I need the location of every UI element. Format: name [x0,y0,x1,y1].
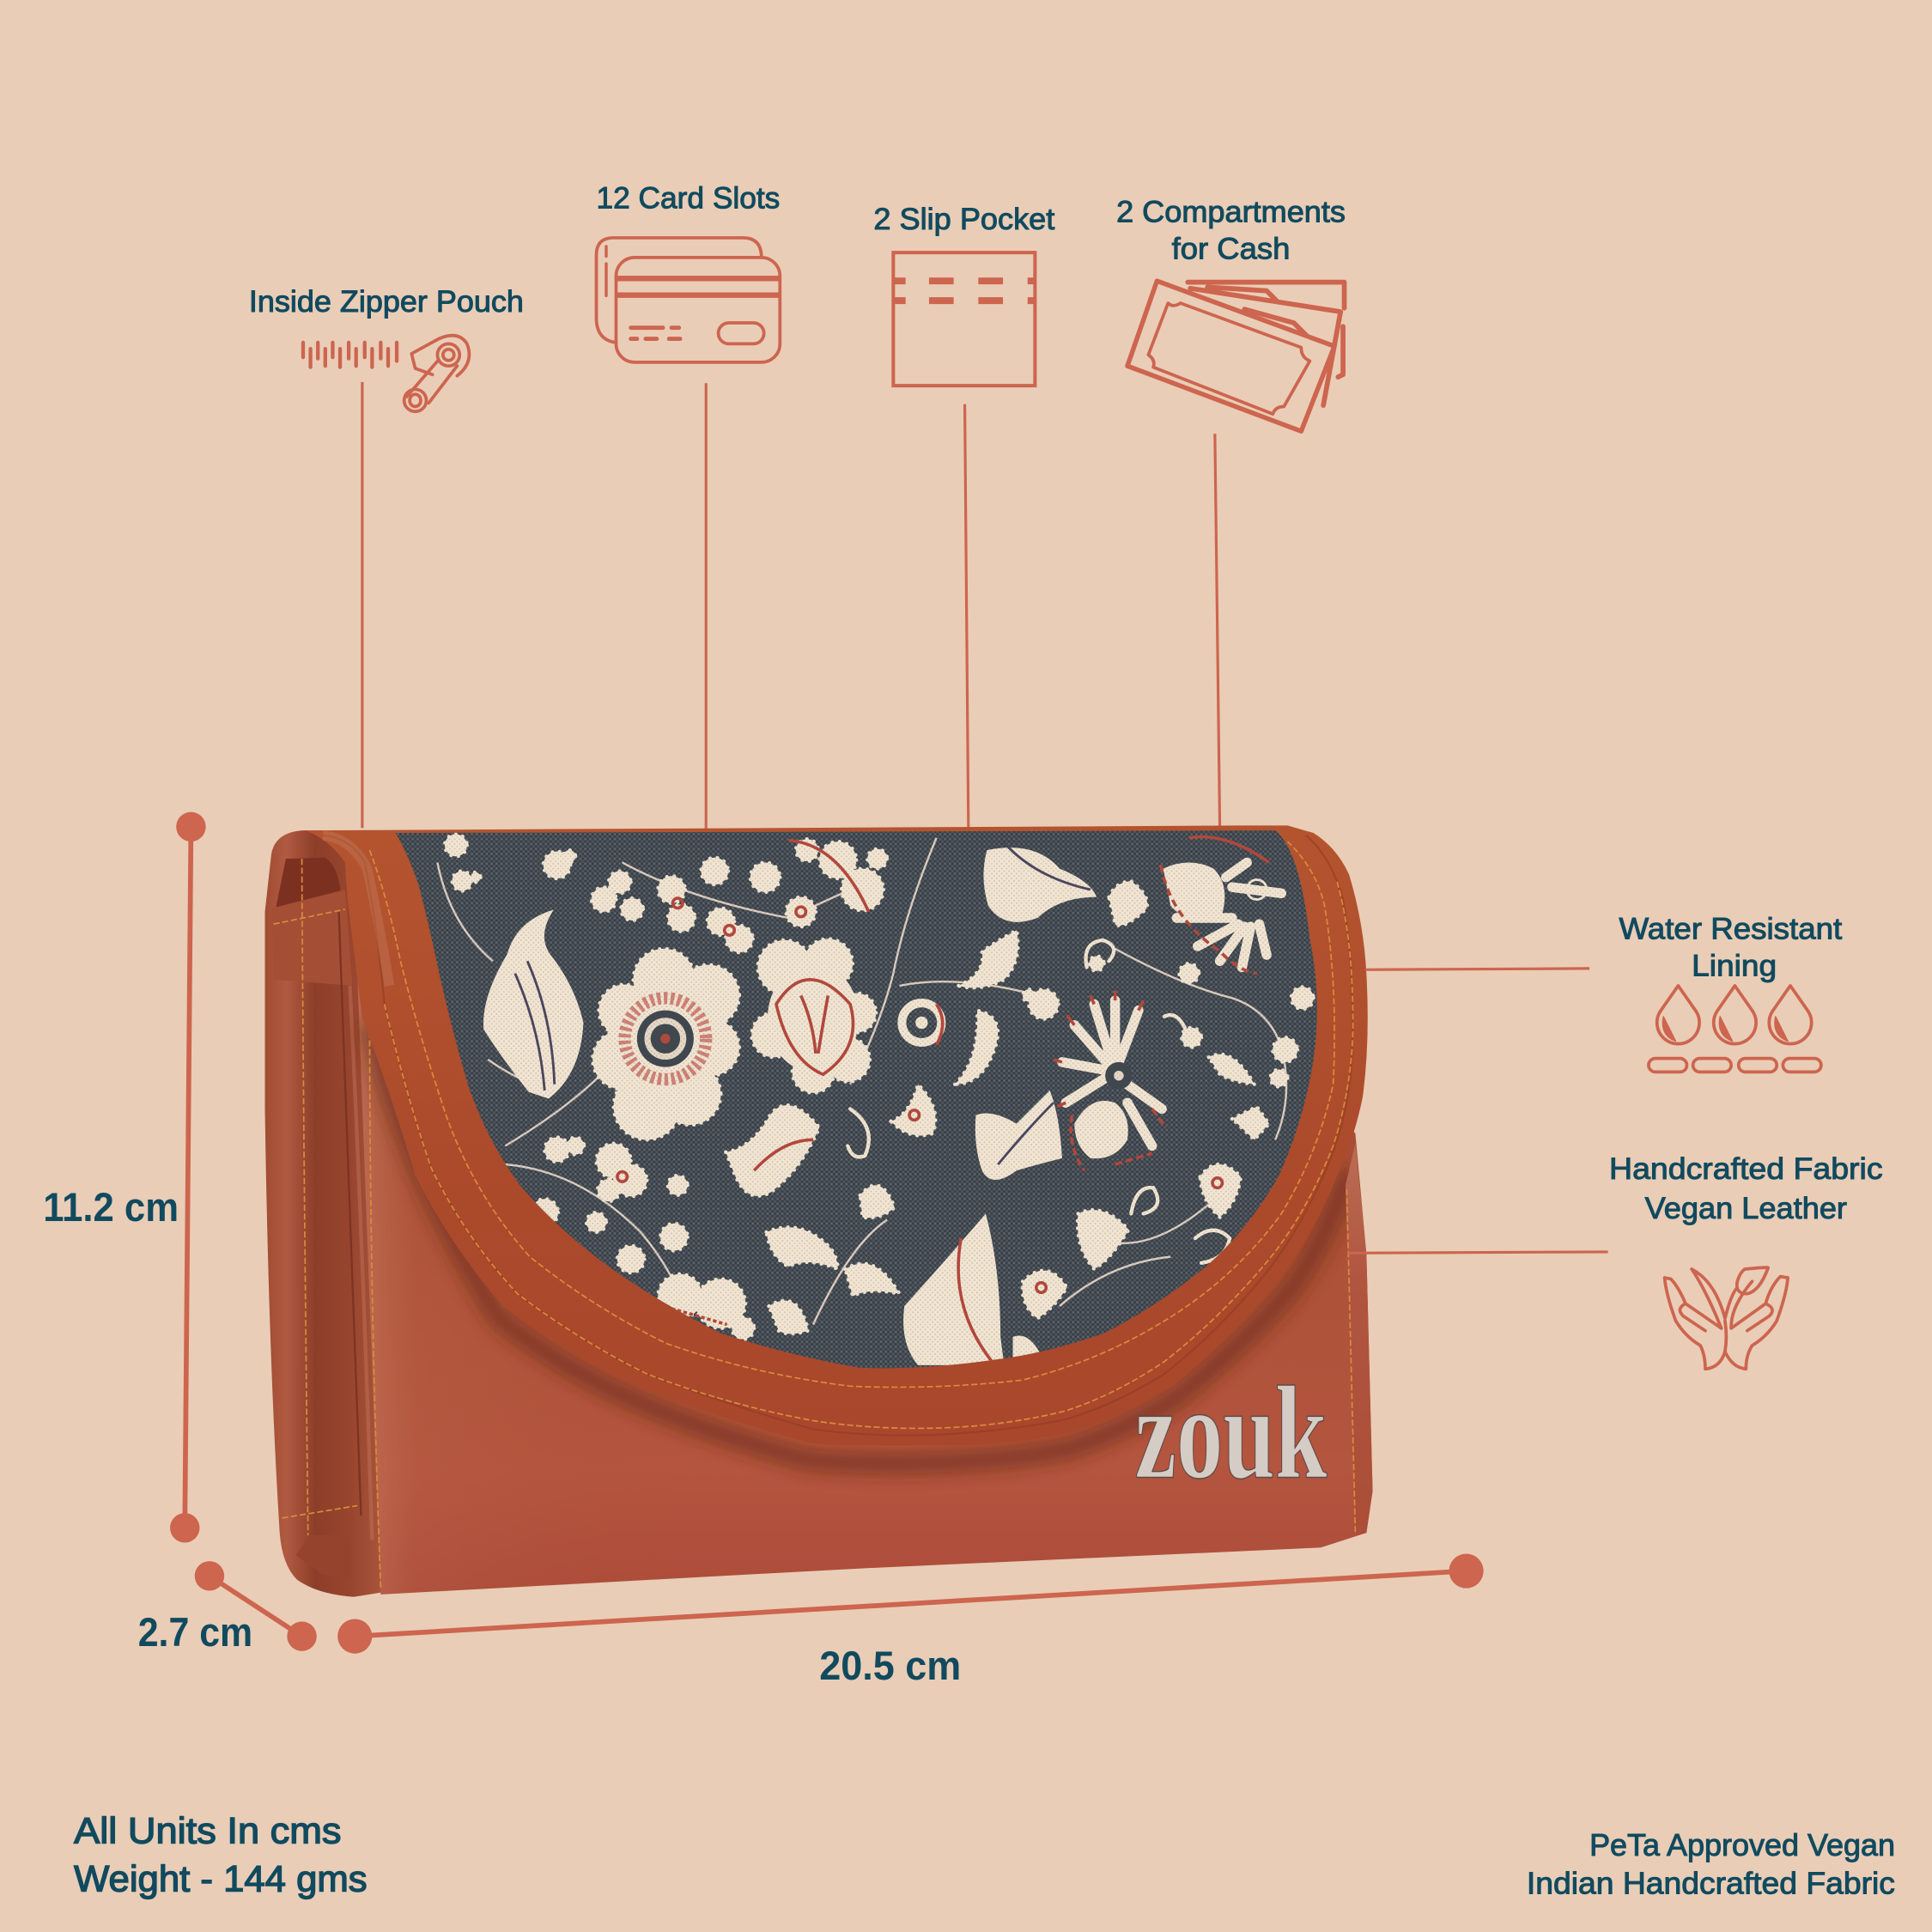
leader line: fabric [1348,1252,1608,1253]
wallet: flap binding [306,825,1368,1445]
wallet: left gusset [265,830,385,1597]
leader line: slip pocket [965,404,969,833]
note: PeTa approved: Indian Handcrafted Fabric [1527,1867,1895,1901]
note: units and weight [74,1811,368,1900]
label: Inside Zipper Pouch: Inside Zipper Pouch [249,285,524,319]
icon: water drops [1649,986,1821,1072]
fabric: second flower [751,939,876,1093]
label: Handcrafted Fabric Vegan Leather: Handcrafted Fabric [1609,1152,1883,1186]
note: units and weight: All Units In cms [74,1811,341,1852]
leader line: zipper [361,382,363,828]
wallet: metal zouk logo: zouk [1135,1359,1327,1507]
dimension: height 11.2 cm [43,812,206,1543]
note: units and weight: Weight - 144 gms [74,1859,368,1900]
note: PeTa approved [1527,1828,1895,1901]
wallet: body right edge strip [1346,1144,1373,1535]
label: Water Resistant Lining [1619,912,1842,982]
fabric: lower left florets [531,1137,754,1340]
wallet product image [265,813,1373,1597]
fabric: top right flower [1161,837,1281,974]
icon: cash [1127,281,1345,431]
label: 2 Compartments for Cash [1116,195,1346,265]
fabric: right florets [1078,987,1314,1269]
fabric: third flower [1054,991,1165,1170]
label: 2 Compartments for Cash: for Cash [1172,232,1290,265]
fabric: vines [437,838,1286,1325]
label: 2 Slip Pocket: 2 Slip Pocket [873,203,1055,236]
dimension: width 20.5 cm: 20.5 cm [819,1643,961,1689]
label: 12 Card Slots: 12 Card Slots [597,182,780,216]
label: Handcrafted Fabric Vegan Leather [1609,1152,1883,1225]
leader line: cash [1215,434,1220,828]
label: 2 Compartments for Cash: 2 Compartments [1116,195,1346,228]
icon: slip pocket [893,252,1035,386]
fabric: large flower [592,949,739,1139]
wallet: stitching [369,841,1334,1387]
fabric: left leaf [485,913,581,1097]
wallet: main body [357,974,1373,1595]
fabric: leaves lower center [726,1084,1067,1365]
fabric: center motifs [902,843,1201,1084]
fabric: light weave over print [382,813,1343,1380]
wallet: floral fabric panel [382,813,1343,1380]
label: Handcrafted Fabric Vegan Leather: Vegan Leather [1645,1192,1847,1225]
note: PeTa approved: PeTa Approved Vegan [1589,1828,1895,1862]
dimension: width 20.5 cm [337,1553,1484,1689]
label: Water Resistant Lining: Lining [1692,949,1777,982]
icon: cards [597,238,780,362]
icon: zipper [303,336,469,411]
dimension: depth 2.7 cm: 2.7 cm [138,1610,252,1656]
fabric: top scattered florets [445,834,887,952]
dimension: height 11.2 cm: 11.2 cm [43,1185,179,1230]
icon: hands and leaf [1665,1267,1788,1369]
label: Water Resistant Lining: Water Resistant [1619,912,1842,945]
leader line: cards [705,383,707,833]
dimension: depth 2.7 cm [138,1561,317,1656]
